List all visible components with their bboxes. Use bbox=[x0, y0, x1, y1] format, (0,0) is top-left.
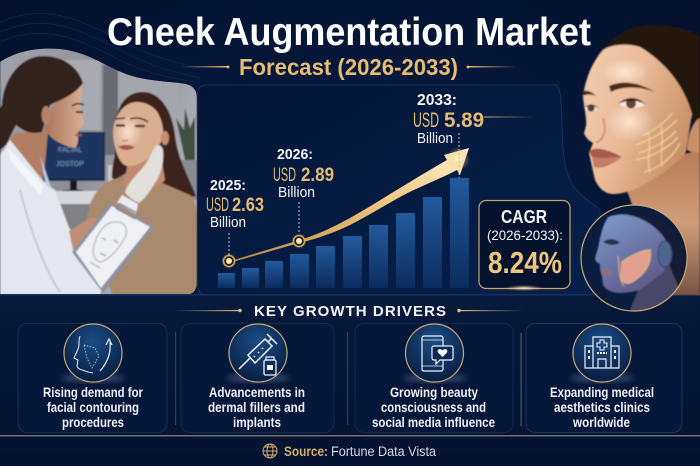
card: dermal fillers bbox=[181, 324, 334, 432]
CAGR callout: (2026-2033): bbox=[487, 227, 563, 243]
subtitle with gold rules: Forecast (2026-2033) bbox=[239, 54, 458, 80]
CAGR callout bbox=[479, 200, 570, 291]
label: facial contouring bbox=[47, 399, 139, 415]
label: procedures bbox=[62, 414, 124, 430]
brows and eyes bbox=[582, 83, 655, 112]
label bbox=[372, 384, 495, 430]
label 2025: 2025: bbox=[210, 177, 246, 194]
footer source bbox=[263, 444, 436, 459]
divider bbox=[175, 332, 176, 425]
growth arrow bbox=[229, 147, 470, 263]
label 2026: 2026: bbox=[277, 146, 313, 163]
label bbox=[208, 384, 305, 430]
section heading: key growth drivers bbox=[175, 303, 524, 320]
patient bbox=[87, 92, 197, 295]
hair bbox=[595, 25, 700, 125]
ear bbox=[687, 118, 700, 153]
bars bbox=[218, 178, 469, 288]
glow under icon bbox=[226, 374, 290, 382]
label 2025 bbox=[206, 177, 264, 231]
label: Rising demand for bbox=[43, 384, 143, 400]
label bbox=[550, 384, 654, 430]
hand bbox=[69, 218, 99, 250]
icon: globe bbox=[263, 444, 277, 458]
footer source: Source: bbox=[284, 444, 328, 459]
label: Expanding medical bbox=[550, 384, 654, 400]
glove bbox=[125, 145, 163, 203]
label: dermal fillers and bbox=[208, 399, 305, 415]
label 2025: Billion bbox=[210, 215, 246, 231]
card: beauty consciousness bbox=[355, 324, 513, 432]
chart panel bbox=[198, 85, 600, 295]
label 2033: 5.89 bbox=[444, 109, 484, 132]
sleeve cuff bbox=[117, 195, 138, 214]
label 2025: USD bbox=[206, 195, 229, 216]
icon: clinic building bbox=[573, 324, 631, 382]
glow under icon bbox=[61, 374, 125, 382]
glow under icon bbox=[570, 374, 634, 382]
marker 2033 dotted leader bbox=[458, 133, 460, 178]
monitor: FACIAL bbox=[58, 147, 82, 154]
icon: face with upward arrow bbox=[64, 324, 122, 382]
label: implants bbox=[233, 414, 281, 430]
label: social media influence bbox=[372, 414, 495, 430]
title: Cheek Augmentation Market bbox=[107, 11, 591, 54]
bottom band bbox=[0, 295, 700, 466]
label: consciousness and bbox=[381, 399, 486, 415]
label 2033 bbox=[413, 92, 484, 147]
divider bbox=[520, 333, 522, 426]
background wave lines bbox=[0, 13, 200, 82]
photo: doctor examining patient bbox=[0, 45, 197, 295]
label 2025: 2.63 bbox=[232, 195, 264, 216]
nose shadow bbox=[596, 118, 605, 143]
cheek lines bbox=[636, 113, 680, 172]
label 2026: Billion bbox=[278, 185, 315, 201]
label 2026: USD bbox=[273, 165, 296, 186]
card: medical aesthetics clinics bbox=[526, 324, 682, 432]
portrait: woman with cheek lines bbox=[582, 25, 700, 295]
section heading: key growth drivers: KEY GROWTH DRIVERS bbox=[254, 303, 446, 320]
divider bbox=[347, 332, 348, 425]
footer source: Fortune Data Vista bbox=[331, 444, 436, 459]
marker 2025 bbox=[221, 233, 237, 269]
plant bbox=[176, 108, 195, 160]
marker 2026 bbox=[291, 202, 307, 249]
glow under icon bbox=[403, 374, 467, 382]
label bbox=[43, 384, 143, 430]
face bbox=[583, 45, 692, 194]
monitor: JOSTOP bbox=[56, 161, 84, 168]
card: facial contouring bbox=[18, 324, 167, 432]
label 2026: 2.89 bbox=[301, 165, 334, 186]
label: worldwide bbox=[572, 414, 630, 430]
icon: syringe and vial bbox=[229, 324, 287, 382]
label: Growing beauty bbox=[390, 384, 478, 400]
clipboard bbox=[72, 203, 154, 293]
footer rule bbox=[0, 435, 700, 436]
CAGR callout: CAGR bbox=[501, 207, 547, 227]
label: Advancements in bbox=[209, 384, 305, 400]
neck bbox=[626, 150, 700, 295]
label 2033: USD bbox=[413, 109, 439, 132]
doctor bbox=[0, 56, 104, 295]
label: aesthetics clinics bbox=[554, 399, 650, 415]
label 2033: 2033: bbox=[417, 92, 457, 109]
label 2033: Billion bbox=[417, 131, 453, 147]
label 2026 bbox=[273, 146, 334, 201]
CAGR callout: 8.24% bbox=[488, 245, 562, 280]
inset circle: cheek implant anatomy bbox=[581, 205, 690, 315]
lips bbox=[589, 149, 622, 158]
monitor bbox=[43, 132, 105, 194]
icon: phone with heart message bbox=[406, 324, 464, 382]
